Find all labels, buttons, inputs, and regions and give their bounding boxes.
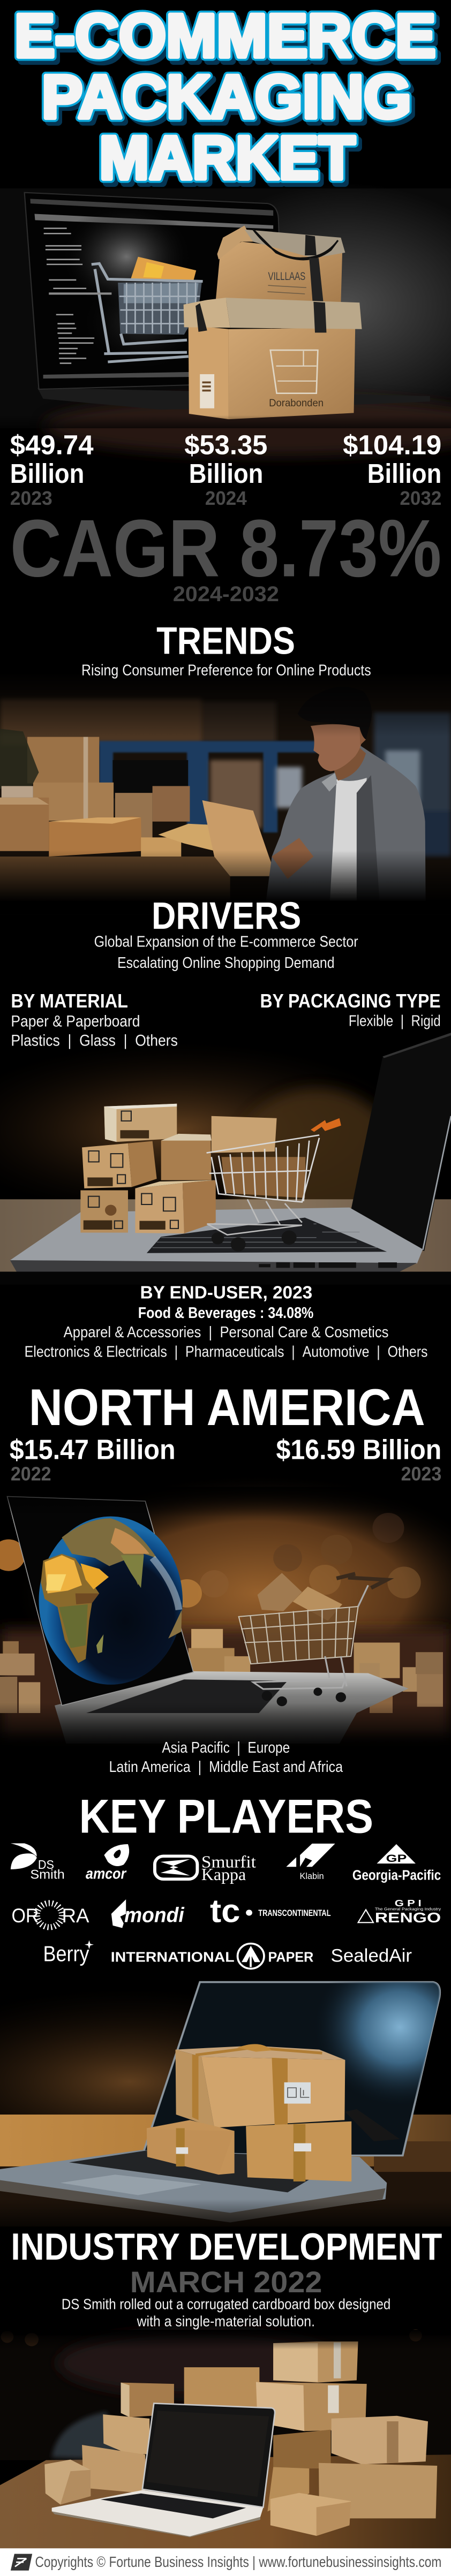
by material: [11, 990, 178, 1049]
logo: International Paper: PAPER: [268, 1949, 313, 1965]
logo: Georgia-Pacific: [352, 1844, 441, 1883]
logo: mondi: [111, 1899, 185, 1928]
trends heading: TRENDS: [156, 619, 295, 662]
by material: Plastics | Glass | Others: [11, 1032, 178, 1049]
stat: 2032: $104.19: [343, 430, 441, 460]
logo: Transcontinental: TRANSCONTINENTAL: [258, 1907, 331, 1918]
logo: International Paper: [111, 1944, 313, 1969]
logo: DS Smith: [11, 1843, 65, 1882]
key players heading: KEY PLAYERS: [79, 1790, 373, 1843]
title line 2: PACKAGING: [45, 66, 415, 134]
logo: amcor: [86, 1844, 129, 1883]
logo: DS Smith: DS: [38, 1858, 54, 1872]
end-user and regional section: [0, 1283, 451, 1749]
laptop screen: [142, 1982, 440, 2156]
logo: Orora: RA: [62, 1905, 89, 1927]
by end-user: [25, 1283, 428, 1361]
stat: 2023: 2023: [10, 488, 52, 509]
drivers and segmentation section: [0, 895, 451, 1285]
logo: Orora: [11, 1903, 89, 1927]
laptop screen: [25, 193, 283, 389]
logo: Smurfit Kappa: Kappa: [201, 1866, 246, 1884]
lower parcel: [184, 298, 362, 419]
main parcel: [176, 2044, 345, 2127]
laptop base: [37, 388, 430, 410]
laptop base: [0, 2150, 387, 2221]
north america 2022: 2022: [11, 1463, 51, 1484]
stat: 2024: 2024: [205, 488, 247, 509]
title line 3: MARKET: [99, 124, 355, 192]
blurred chair: [52, 2412, 121, 2460]
market size and trends section: [0, 430, 451, 914]
development text: [62, 2296, 390, 2330]
table: [0, 1199, 451, 1273]
stat: 2024: Billion: [189, 459, 263, 489]
trends text: Rising Consumer Preference for Online Products: [81, 662, 371, 679]
logos: [11, 1843, 441, 1969]
table: [0, 2115, 451, 2169]
industry development section: [0, 2226, 451, 2576]
white laptop: [52, 2403, 275, 2537]
logo: GPI Rengo: The General Packaging Industry: [375, 1907, 441, 1911]
logo: Sealed Air: SealedAir: [331, 1945, 412, 1966]
by material: BY MATERIAL: [11, 990, 128, 1012]
region list: [109, 1739, 343, 1776]
icon: Fortune Business Insights logo: [11, 2554, 32, 2571]
development text: DS Smith rolled out a corrugated cardboard box designed: [62, 2296, 390, 2313]
laptop lid: [202, 800, 276, 876]
title line 1: E-COMMERCE: [14, 2, 436, 70]
bokeh lights: [0, 1513, 421, 1608]
regional illustration: globe on laptop and cart: [0, 1473, 451, 1749]
by end-user: Food & Beverages : 34.08%: [138, 1305, 313, 1322]
upper parcel: VILLLAAS: [268, 269, 305, 283]
stat: 2032: 2032: [400, 488, 441, 509]
by end-user: Apparel & Accessories | Personal Care & Cosmetics: [64, 1324, 388, 1341]
parcels: [44, 2342, 437, 2536]
logo: mondi: mondi: [124, 1904, 185, 1927]
shopping cart on screen: [49, 257, 203, 362]
stat: 2024: [184, 430, 267, 509]
title line 1: E-COMMERCE: [14, 2, 436, 70]
stat: 2023: [10, 430, 94, 509]
development text: with a single-material solution.: [137, 2313, 315, 2330]
hero section: [0, 2, 451, 456]
stat: 2023: Billion: [10, 459, 84, 489]
small shopping cart: [207, 1116, 341, 1252]
title line 2: PACKAGING: [42, 63, 411, 131]
logo: Transcontinental: [210, 1893, 331, 1929]
lower parcels: [147, 2120, 351, 2181]
logo: GPI Rengo: [358, 1898, 441, 1926]
logo: Transcontinental: tc: [210, 1893, 240, 1929]
title line 3: MARKET: [103, 127, 359, 196]
logo: Smurfit Kappa: Smurfit: [201, 1853, 256, 1872]
by material: Paper & Paperboard: [11, 1013, 140, 1030]
drivers text: Global Expansion of the E-commerce Sector: [94, 933, 358, 950]
industry development illustration: laptop and parcels: [0, 2329, 451, 2549]
laptop base: [55, 1671, 409, 1744]
parcels on laptop illustration: [0, 1981, 451, 2226]
globe: [39, 1517, 183, 1685]
laptop base: [10, 1208, 423, 1263]
logo: Georgia-Pacific: GP: [386, 1853, 407, 1865]
logo: Smurfit Kappa: [155, 1853, 256, 1884]
logo: Berry: Berry: [43, 1941, 89, 1966]
stat: 2032: [343, 430, 441, 509]
title: E-COMMERCE PACKAGING MARKET: [14, 2, 439, 196]
fade top: [0, 671, 451, 737]
small blurred cubes: [0, 1629, 443, 1713]
north america 2022: [10, 1435, 176, 1484]
logo: DS Smith: Smith: [30, 1867, 65, 1882]
by packaging type: [260, 990, 441, 1029]
title line 3: MARKET: [99, 124, 355, 192]
logo: International Paper: INTERNATIONAL: [111, 1949, 235, 1965]
logo: GPI Rengo: RENGO: [375, 1910, 441, 1926]
north america 2023: [276, 1435, 441, 1484]
north america 2023: 2023: [401, 1463, 441, 1484]
parcel stack: [80, 1104, 239, 1233]
laptop screen: [7, 1496, 193, 1706]
title line 2: PACKAGING: [42, 63, 411, 131]
logo: Orora: OR: [11, 1905, 39, 1927]
footer: [0, 2548, 451, 2576]
table: [0, 2454, 451, 2549]
by end-user: BY END-USER, 2023: [140, 1283, 312, 1302]
stat: 2023: $49.74: [10, 430, 94, 460]
north america 2022: $15.47 Billion: [10, 1435, 176, 1465]
wire cart: [239, 1573, 387, 1706]
logo: Klabin: Klabin: [300, 1872, 324, 1881]
logo: amcor: amcor: [86, 1865, 127, 1883]
drivers text: [94, 933, 358, 972]
lower parcel: Dorabonden: [269, 398, 324, 409]
upper parcel: [216, 225, 345, 332]
region list: Asia Pacific | Europe: [162, 1739, 290, 1756]
CAGR: 2024-2032: [173, 582, 279, 606]
hero illustration: laptop, cart and parcels: [0, 183, 451, 456]
key players section: [0, 1739, 451, 2234]
blue shelving: [99, 741, 318, 832]
logo: Klabin: [286, 1844, 335, 1881]
trends illustration: man with laptop among parcels: [0, 671, 451, 914]
stat: 2024: $53.35: [184, 430, 267, 460]
logo: GPI Rengo: G P I: [395, 1898, 422, 1908]
region list: Latin America | Middle East and Africa: [109, 1759, 343, 1776]
date: MARCH 2022: [130, 2266, 322, 2299]
drivers text: Escalating Online Shopping Demand: [117, 954, 335, 972]
laptop screen: [351, 1033, 451, 1251]
drivers illustration: parcels and cart on laptop: [0, 1033, 451, 1285]
drivers heading: DRIVERS: [152, 895, 301, 937]
man: [265, 687, 426, 912]
parcels on the left: [0, 729, 230, 912]
